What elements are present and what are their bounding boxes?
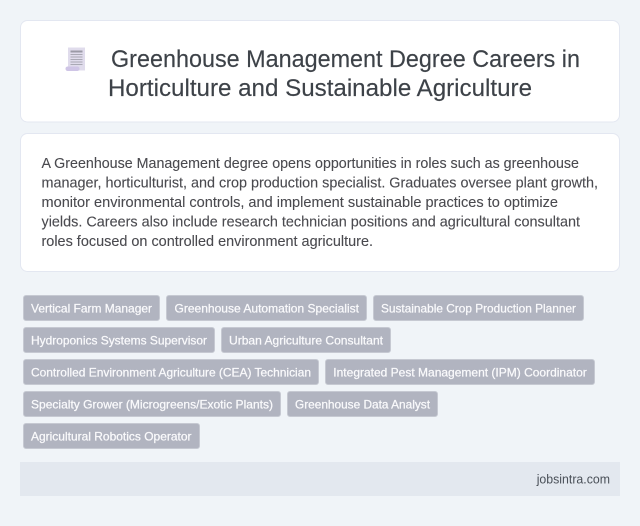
tag: [326, 360, 594, 384]
tag: [166, 296, 366, 320]
tag: [222, 328, 390, 352]
description text: [42, 156, 598, 250]
tag: Sustainable Crop Production Planner: [381, 302, 576, 316]
tag: Hydroponics Systems Supervisor: [31, 334, 207, 348]
tag: Greenhouse Data Analyst: [295, 398, 431, 412]
tag: Vertical Farm Manager: [31, 302, 152, 316]
description text: A Greenhouse Management degree opens opportunities in roles such as greenhouse: [42, 156, 579, 172]
tag: [288, 392, 438, 416]
tag: Urban Agriculture Consultant: [229, 334, 384, 348]
footer: jobsintra.com: [536, 472, 610, 486]
tag: [24, 296, 160, 320]
icon: paper scroll: [66, 48, 85, 71]
title: [108, 46, 580, 102]
tag: [24, 360, 318, 384]
description text: manager, horticulturist, and crop production specialist. Graduates oversee plant growth,: [42, 176, 598, 192]
tag: [374, 296, 584, 320]
panel: title card: [20, 20, 620, 122]
tag: Integrated Pest Management (IPM) Coordinator: [333, 366, 587, 380]
description text: monitor environmental controls, and implement sustainable practices to optimize: [42, 195, 558, 211]
tag: [24, 424, 200, 448]
tag: Agricultural Robotics Operator: [31, 430, 192, 444]
description text: roles focused on controlled environment agriculture.: [42, 234, 373, 250]
tag: [24, 392, 280, 416]
panel: description: [20, 134, 620, 272]
description text: yields. Careers also include research technician positions and agricultural consultant: [42, 214, 580, 230]
footer: [20, 462, 620, 496]
tag: Specialty Grower (Microgreens/Exotic Plants): [31, 398, 273, 412]
title: Horticulture and Sustainable Agriculture: [108, 75, 532, 102]
title: Greenhouse Management Degree Careers in: [111, 46, 580, 73]
tag: Greenhouse Automation Specialist: [174, 302, 360, 316]
career tags: [24, 296, 594, 448]
tag: Controlled Environment Agriculture (CEA) Technician: [31, 366, 311, 380]
tag: [24, 328, 214, 352]
